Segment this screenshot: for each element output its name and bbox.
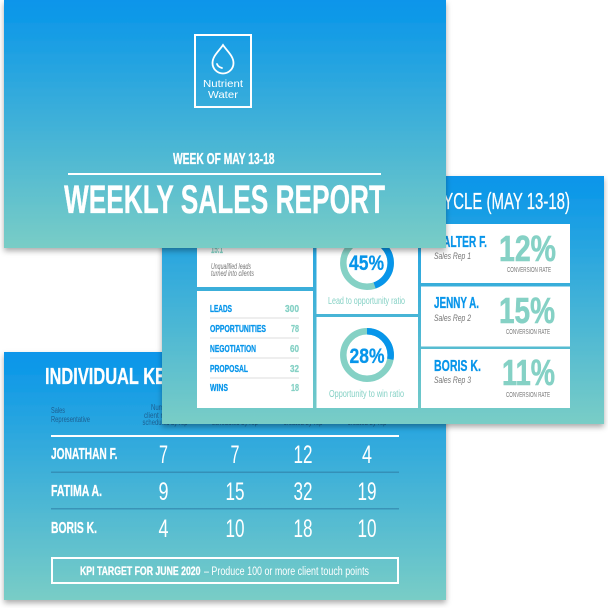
table row: Jonathan F.: 4	[362, 441, 372, 469]
card: Boris K.: Sales Rep 3	[434, 375, 472, 386]
callout: KPI target	[52, 558, 398, 583]
panel: title slide	[4, 0, 446, 248]
card: Boris K.: CONVERSION RATE	[506, 392, 550, 399]
table row: Fatima A.: 32	[294, 478, 312, 506]
card: Walter F.	[421, 224, 570, 283]
card: sales funnel list: PROPOSAL	[210, 363, 248, 375]
icon: water drop	[212, 45, 234, 74]
table row: Jonathan F.: 12	[294, 441, 312, 469]
card: Jenny A.	[421, 286, 570, 346]
card: sales funnel list: NEGOTIATION	[210, 343, 256, 355]
table row: Jonathan F.: 7	[230, 441, 240, 469]
panel: individual KPI slide	[4, 352, 446, 600]
card: lead ratio: 15:1	[211, 242, 223, 256]
table column headers	[51, 403, 387, 427]
table row: Fatima A.: 19	[358, 478, 376, 506]
card: 45% lead to opportunity donut	[316, 224, 418, 314]
table row: Boris K.: 4	[158, 515, 169, 543]
card: sales funnel list: 32	[290, 363, 299, 375]
logo: Nutrient Water: Nutrient	[203, 78, 243, 90]
table column headers: Number of	[151, 403, 180, 412]
card: 28% opportunity to win donut: 28%	[350, 345, 385, 368]
table row: Jonathan F.: 7	[159, 441, 168, 469]
card: 28% opportunity to win donut: Opportunity to win ratio	[329, 388, 404, 400]
table column headers: Representative	[51, 415, 90, 424]
card: Jenny A.: CONVERSION RATE	[506, 329, 550, 336]
card: Jenny A.: 15%	[499, 290, 555, 331]
table column headers: Sales	[51, 406, 65, 415]
table row: Boris K.: BORIS K.	[51, 520, 97, 537]
callout: KPI target: KPI TARGET FOR JUNE 2020	[80, 566, 200, 578]
logo: Nutrient Water	[195, 35, 251, 107]
card: 28% opportunity to win donut	[316, 317, 418, 408]
card: lead ratio	[197, 224, 313, 287]
card: Boris K.	[421, 349, 570, 408]
table row: Fatima A.: FATIMA A.	[51, 483, 102, 500]
card: sales funnel list	[197, 291, 313, 408]
logo: Nutrient Water: Water	[208, 89, 239, 101]
card: sales funnel list: LEADS	[210, 303, 232, 315]
card: 45% lead to opportunity donut: Lead to opportunity ratio	[328, 295, 405, 307]
table row: Fatima A.: 15	[226, 478, 244, 506]
card: Jenny A.: JENNY A.	[434, 295, 479, 312]
title: WEEKLY SALES REPORT	[64, 178, 385, 222]
card: sales funnel list: 300	[285, 303, 299, 315]
card: Jenny A.: Sales Rep 2	[434, 313, 472, 324]
card: Walter F.: CONVERSION RATE	[507, 267, 551, 274]
card: Walter F.: Sales Rep 1	[434, 251, 471, 262]
table row: Boris K.: 18	[294, 515, 312, 543]
table row: Boris K.: 10	[358, 515, 376, 543]
table row: Boris K.: 10	[226, 515, 244, 543]
table column headers: scheduled by rep	[212, 418, 258, 427]
card: Boris K.: BORIS K.	[434, 358, 481, 375]
table row: Boris K.	[51, 515, 376, 543]
callout: KPI target: – Produce 100 or more client touch points	[204, 566, 369, 578]
panel: sales cycle slide	[162, 176, 604, 424]
card: sales funnel list: 78	[291, 323, 299, 335]
table row: Fatima A.: 9	[158, 478, 168, 506]
heading: individual KPI: INDIVIDUAL KE	[45, 363, 166, 389]
table row: Jonathan F.: JONATHAN F.	[51, 446, 118, 463]
table column headers: scheduled by rep	[142, 418, 188, 427]
card: Boris K.: 11%	[502, 352, 555, 393]
table column headers: created by rep	[284, 418, 323, 427]
card: lead ratio: turned into clients	[211, 269, 254, 278]
card: sales funnel list: 18	[291, 382, 299, 394]
card: Walter F.: WALTER F.	[434, 234, 487, 251]
card: sales funnel list: 60	[290, 343, 299, 355]
card: sales funnel list: WINS	[210, 382, 228, 394]
card: sales funnel list: OPPORTUNITIES	[210, 323, 266, 335]
table column headers: created by rep	[348, 418, 387, 427]
table row: Fatima A.	[51, 478, 376, 506]
table column headers: client meetings	[144, 411, 186, 420]
table row: Jonathan F.	[51, 441, 372, 469]
subheading: week of: WEEK OF MAY 13-18	[173, 151, 275, 168]
card: lead ratio: Unqualified leads	[211, 262, 251, 271]
card: 45% lead to opportunity donut: 45%	[349, 252, 384, 275]
card: Walter F.: 12%	[499, 228, 556, 269]
